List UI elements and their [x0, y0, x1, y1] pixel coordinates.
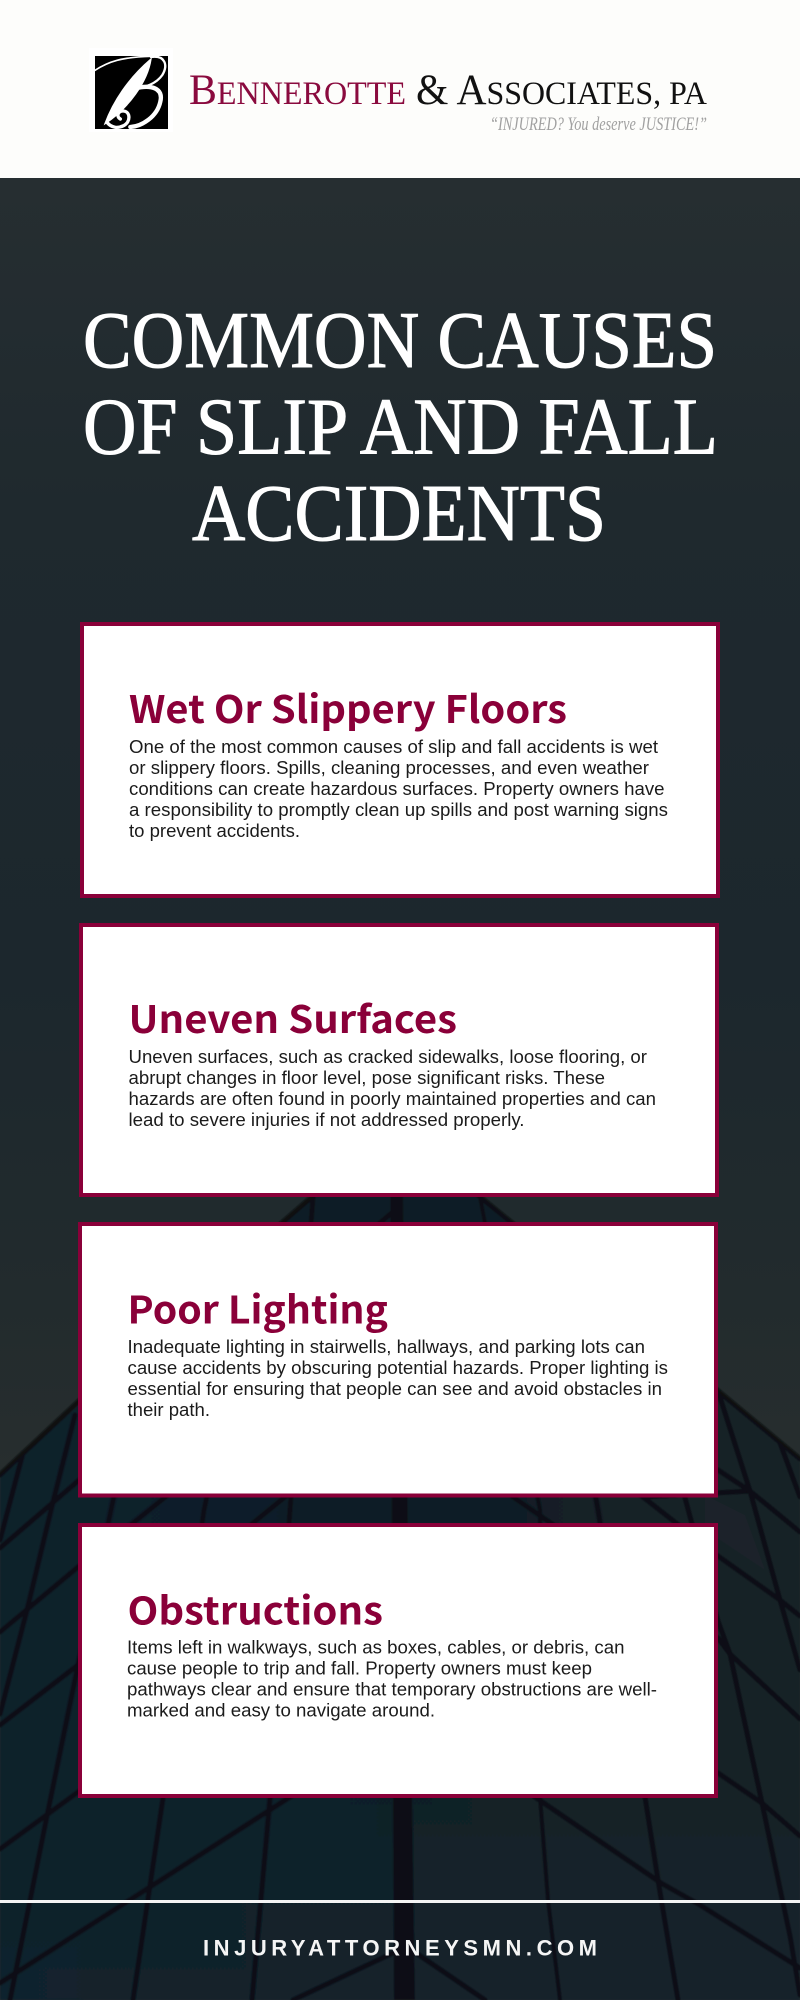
text block: obstructions: cause people to trip and fall. Property owners must keep — [127, 1658, 592, 1678]
footer divider — [0, 1900, 800, 1903]
heading: uneven surfaces: Uneven Surfaces — [128, 989, 457, 1044]
text block: poor lighting: Inadequate lighting in stairwells, hallways, and parking lots can — [128, 1336, 645, 1357]
title — [83, 297, 718, 558]
text block: poor lighting — [128, 1336, 668, 1420]
text block: poor lighting: essential for ensuring that people can see and avoid obstacles in — [128, 1378, 662, 1399]
heading: wet or slippery floors: Wet Or Slippery Floors — [129, 679, 567, 734]
text block: wet or slippery floors: or slippery floors. Spills, cleaning processes, and even weather — [129, 757, 649, 778]
text block: wet or slippery floors: One of the most common causes of slip and fall accidents is wet — [129, 736, 659, 757]
text block: obstructions — [127, 1636, 657, 1720]
text block: uneven surfaces — [128, 1046, 656, 1130]
heading: poor lighting: Poor Lighting — [128, 1280, 388, 1334]
text block: obstructions: marked and easy to navigate around. — [127, 1700, 435, 1720]
panel: wet or slippery floors — [82, 624, 718, 896]
heading: obstructions: Obstructions — [128, 1580, 383, 1636]
logo: monogram — [89, 48, 173, 132]
footer: website: INJURYATTORNEYSMN.COM — [203, 1936, 597, 1960]
title: ACCIDENTS — [192, 470, 606, 558]
header band — [0, 0, 800, 178]
text block: obstructions: Items left in walkways, such as boxes, cables, or debris, can — [127, 1636, 624, 1658]
background: glass skyscraper — [0, 1125, 800, 2000]
logo: firm name: & ASSOCIATES, PA — [416, 67, 707, 114]
text block: poor lighting: their path. — [128, 1399, 210, 1420]
title: COMMON CAUSES — [83, 297, 717, 385]
text block: uneven surfaces: abrupt changes in floor level, pose significant risks. These — [128, 1067, 605, 1088]
text block: uneven surfaces: lead to severe injuries if not addressed properly. — [128, 1109, 524, 1130]
text block: wet or slippery floors: conditions can create hazardous surfaces. Property owners have — [129, 778, 664, 799]
logo: tagline: “INJURED? You deserve JUSTICE!” — [490, 114, 707, 135]
text block: wet or slippery floors — [129, 736, 668, 841]
text block: obstructions: pathways clear and ensure that temporary obstructions are well- — [127, 1678, 657, 1700]
logo: firm name: BENNEROTTE — [189, 67, 406, 114]
text block: wet or slippery floors: a responsibility to promptly clean up spills and post warning signs — [129, 799, 668, 820]
panel: obstructions — [80, 1525, 716, 1796]
text block: uneven surfaces: hazards are often found in poorly maintained properties and can — [128, 1088, 656, 1109]
text block: poor lighting: cause accidents by obscuring potential hazards. Proper lighting is — [128, 1357, 668, 1378]
panel: uneven surfaces — [81, 925, 717, 1195]
text block: wet or slippery floors: to prevent accidents. — [129, 820, 300, 841]
text block: uneven surfaces: Uneven surfaces, such as cracked sidewalks, loose flooring, or — [128, 1046, 647, 1067]
logo: firm name — [189, 67, 707, 114]
panel: poor lighting — [80, 1224, 716, 1496]
title: OF SLIP AND FALL — [83, 384, 718, 472]
